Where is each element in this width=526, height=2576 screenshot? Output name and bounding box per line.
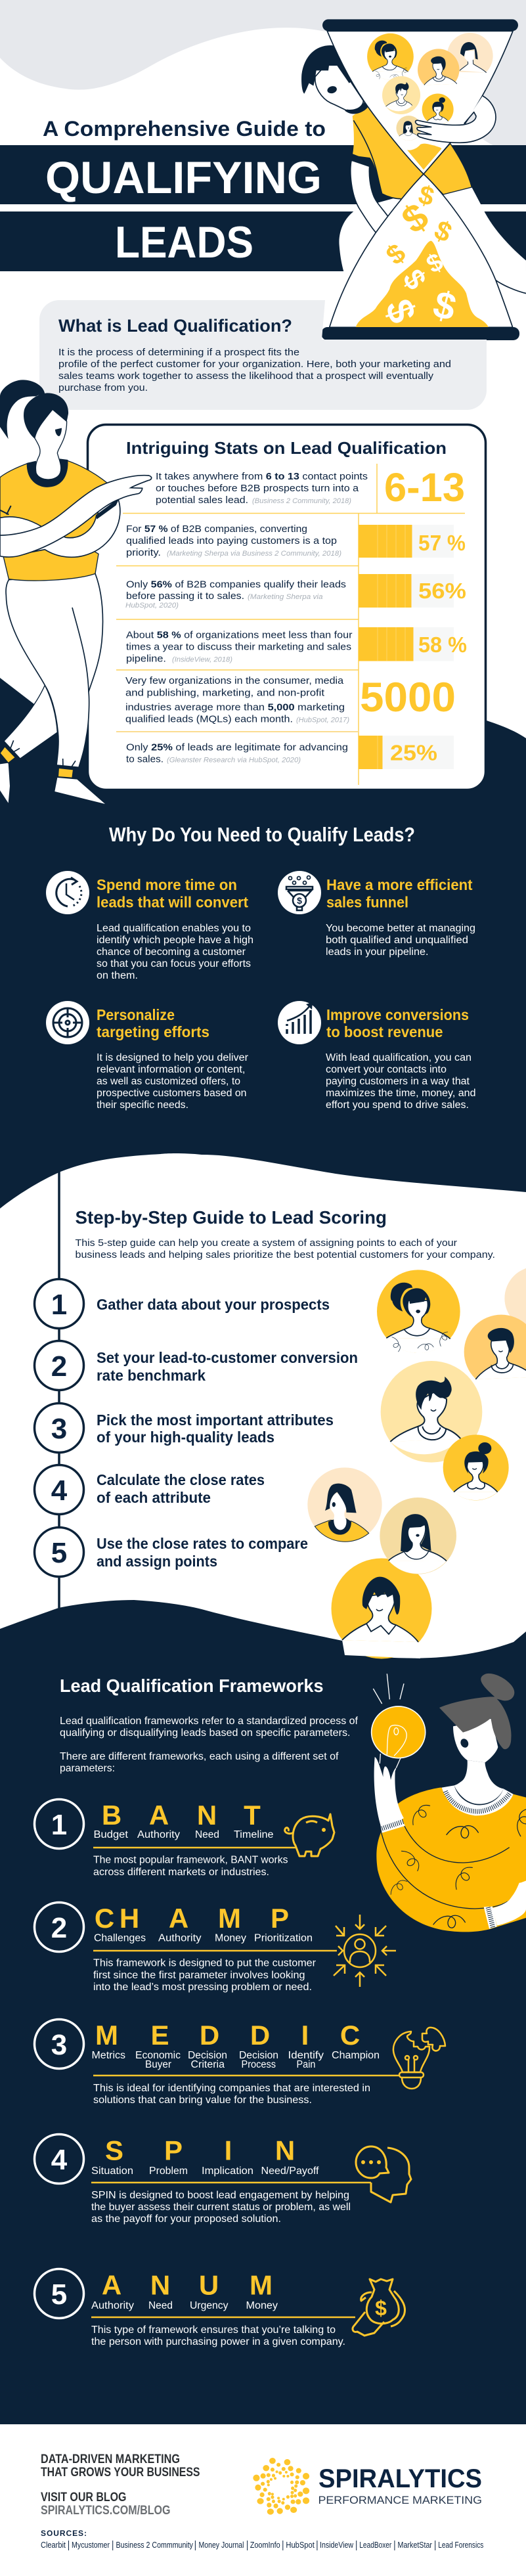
parameters: Prioritization xyxy=(254,1932,313,1944)
icon: funnel xyxy=(278,871,321,914)
step 2: Set your lead-to-customer conversion xyxy=(97,1349,358,1366)
acronym: E xyxy=(150,2020,169,2051)
description: The most popular framework, BANT works xyxy=(93,1855,288,1865)
stats heading: Intriguing Stats on Lead Qualification xyxy=(126,438,447,458)
title band 2 xyxy=(0,211,526,271)
heading: frameworks: Lead Qualification Frameworks xyxy=(60,1676,323,1696)
stat 6 text: Only 25% of leads are legitimate for advancing xyxy=(126,742,348,753)
sources list: InsideView xyxy=(320,2540,353,2550)
stat dividers xyxy=(116,464,465,785)
parameters: Buyer xyxy=(145,2059,171,2070)
description: This framework is designed to put the customer xyxy=(93,1957,317,1969)
acronym: U xyxy=(199,2270,219,2300)
stat 5 text: Very few organizations in the consumer, media xyxy=(125,675,344,686)
reason text xyxy=(326,1052,475,1111)
stat 2 bar: 57 % xyxy=(418,531,466,555)
acronym: P xyxy=(271,1903,289,1934)
parameters: Implication xyxy=(202,2165,253,2177)
acronym: A xyxy=(169,1903,188,1934)
step 4: Calculate the close rates xyxy=(97,1471,265,1488)
stat 3 text: before passing it to sales. xyxy=(126,590,244,602)
falling dollar signs: $ xyxy=(416,180,437,211)
body text xyxy=(58,347,451,393)
acronym: A xyxy=(102,2270,121,2300)
step 1: 1 xyxy=(51,1289,67,1321)
framework 5: ANUM xyxy=(34,2269,405,2347)
stat 1 text: potential sales lead. xyxy=(156,495,248,506)
description: the person with purchasing power in a given company. xyxy=(91,2336,345,2347)
falling dollar signs: $ xyxy=(396,263,433,296)
title: QUALIFYING: QUALIFYING xyxy=(45,152,322,203)
reason title: targeting efforts xyxy=(97,1023,209,1040)
reason text: identify which people have a high xyxy=(97,935,253,946)
reason 2 xyxy=(278,871,475,958)
step 4 xyxy=(34,1465,265,1515)
stat 1 text: (Business 2 Community, 2018) xyxy=(252,497,351,505)
reason text xyxy=(326,923,475,958)
stat 4 text xyxy=(126,629,352,665)
tagline xyxy=(41,2453,200,2518)
description xyxy=(91,2190,351,2225)
sources list: LeadBoxer xyxy=(359,2540,392,2550)
acronym xyxy=(102,2270,273,2300)
title band 1 xyxy=(0,145,526,204)
heading: why qualify: Why Do You Need to Qualify Leads? xyxy=(109,823,415,846)
stat 4 bar: 58 % xyxy=(418,633,467,657)
stat 6 text: (Gleanster Research via HubSpot, 2020) xyxy=(167,757,301,765)
stat 1 text: or touches before B2B prospects turn into a xyxy=(156,483,359,494)
acronym: T xyxy=(244,1800,261,1831)
reason text: You become better at managing xyxy=(326,923,475,934)
reason text: paying customers in a way that xyxy=(326,1076,470,1087)
reason title xyxy=(326,876,473,910)
icon: money bag in hand xyxy=(353,2279,405,2336)
tagline: VISIT OUR BLOG xyxy=(41,2491,126,2504)
intro text: business leads and helping sales prioritize the best potential customers for your company. xyxy=(75,1249,495,1260)
description: into the lead’s most pressing problem or need. xyxy=(93,1982,312,1993)
reason text: relevant information or content, xyxy=(97,1064,246,1075)
sources list: HubSpot xyxy=(286,2540,315,2550)
parameters: Authority xyxy=(137,1829,180,1840)
framework 5: ANUM: 5 xyxy=(51,2278,67,2311)
description: the buyer assess their current status or problem, as well xyxy=(91,2202,351,2213)
background: top grey wave xyxy=(0,0,526,146)
step 1 xyxy=(34,1279,330,1328)
title: LEADS: LEADS xyxy=(115,217,253,267)
framework 1: BANT: 1 xyxy=(51,1809,67,1841)
panel: intriguing stats card xyxy=(88,424,486,789)
stat 2 text xyxy=(126,523,341,558)
framework 3: MEDDIC: 3 xyxy=(51,2029,67,2061)
parameters: Decision xyxy=(188,2050,227,2061)
reason text: With lead qualification, you can xyxy=(326,1052,471,1063)
reason text: Lead qualification enables you to xyxy=(97,923,251,934)
stat 1 text xyxy=(156,471,368,506)
reason title: to boost revenue xyxy=(326,1023,443,1040)
parameters xyxy=(91,2165,319,2177)
logo: spiral of dots xyxy=(253,2458,309,2515)
parameters: Authority xyxy=(91,2300,134,2311)
description: across different markets or industries. xyxy=(93,1867,269,1878)
stat 5 text: qualified leads (MQLs) each month. xyxy=(125,713,293,725)
step 5 xyxy=(34,1528,308,1576)
sources list: Mycustomer xyxy=(72,2540,110,2550)
acronym: S xyxy=(105,2135,123,2166)
reason text xyxy=(97,1052,248,1111)
reason title: leads that will convert xyxy=(97,893,248,910)
step 3: Pick the most important attributes xyxy=(97,1411,334,1429)
icon: head with speech bubble xyxy=(356,2146,411,2202)
tagline: THAT GROWS YOUR BUSINESS xyxy=(41,2466,200,2479)
reason title: Spend more time on xyxy=(97,876,237,893)
parameters: Need xyxy=(195,1829,219,1840)
framework 3: MEDDIC xyxy=(34,2019,445,2106)
stat 6 text: to sales. xyxy=(126,754,164,765)
acronym: B xyxy=(102,1800,121,1831)
stat 5 text: (HubSpot, 2017) xyxy=(296,716,349,724)
parameters: Challenges xyxy=(94,1932,146,1944)
parameters xyxy=(92,2050,380,2070)
reason title xyxy=(97,1006,209,1040)
icon: bulb with puzzle piece xyxy=(393,2028,445,2089)
description: as the payoff for your proposed solution. xyxy=(91,2213,281,2225)
body text: profile of the perfect customer for your organization. Here, both your marketing and xyxy=(58,359,451,370)
reason text: prospective customers based on xyxy=(97,1088,247,1099)
stats content xyxy=(116,438,467,785)
framework 4: SPIN: 4 xyxy=(51,2144,68,2176)
avatars upper xyxy=(307,1270,526,1574)
stat 2 bar xyxy=(359,525,466,558)
reason text: both qualified and unqualified xyxy=(326,935,468,946)
sources list: Money Journal xyxy=(198,2540,244,2550)
icon: target xyxy=(46,1001,89,1044)
tagline: DATA-DRIVEN MARKETING xyxy=(41,2453,180,2466)
falling dollar signs: $ xyxy=(430,214,456,248)
reason title xyxy=(326,1006,469,1040)
parameters: Urgency xyxy=(190,2300,229,2311)
stat 3 text xyxy=(125,579,346,610)
avatars inside hourglass xyxy=(367,33,493,141)
navy section background: frameworks xyxy=(0,1600,526,2424)
stat 3 bar xyxy=(359,574,466,608)
reason text: chance of becoming a customer xyxy=(97,946,246,958)
reason title: Have a more efficient xyxy=(326,876,473,893)
hero illustration: person holding hourglass xyxy=(301,19,526,340)
sources list: Clearbit xyxy=(41,2540,66,2550)
step 4: of each attribute xyxy=(97,1489,211,1506)
description: This is ideal for identifying companies that are interested in xyxy=(93,2083,370,2094)
tagline: SPIRALYTICS.COM/BLOG xyxy=(41,2504,171,2518)
frameworks intro: There are different frameworks, each using a different set of xyxy=(60,1751,339,1762)
parameters: Need/Payoff xyxy=(261,2165,319,2177)
parameters: Economic xyxy=(135,2050,181,2061)
stat 4 bar xyxy=(359,627,467,661)
reason title xyxy=(97,876,248,910)
stat 1 number: 6-13 xyxy=(384,465,465,510)
stat 5 text: and publishing, marketing, and non-profit xyxy=(125,687,325,699)
acronym: H xyxy=(120,1903,139,1934)
parameters: Metrics xyxy=(92,2050,125,2061)
acronym: M xyxy=(95,2020,118,2051)
parameters: Pain xyxy=(297,2059,315,2070)
stat 1 text: It takes anywhere from 6 to 13 contact points xyxy=(156,471,368,482)
avatar cluster xyxy=(307,1266,526,1659)
step 5: 5 xyxy=(51,1537,67,1569)
sources list: Lead Forensics xyxy=(438,2540,484,2550)
description: This type of framework ensures that you’re talking to xyxy=(91,2324,336,2336)
reason text: leads in your pipeline. xyxy=(326,946,428,958)
logo wordmark: SPIRALYTICS xyxy=(318,2464,482,2493)
reason text: maximizes the time, money, and xyxy=(326,1088,475,1099)
description xyxy=(93,1957,317,1993)
divider xyxy=(116,731,359,732)
stat 2 text: (Marketing Sherpa via Business 2 Community, 2018) xyxy=(167,550,341,558)
acronym xyxy=(95,2020,360,2051)
step 3 xyxy=(34,1403,334,1453)
reason text xyxy=(97,923,253,981)
parameters xyxy=(91,2300,278,2311)
acronym: I xyxy=(225,2135,232,2166)
icon: money bag in hand: $ xyxy=(375,2296,387,2320)
reason text: It is designed to help you deliver xyxy=(97,1052,248,1063)
acronym: N xyxy=(197,1800,217,1831)
falling dollar signs: $ xyxy=(422,248,448,279)
illustration: woman pointing at stats xyxy=(0,380,152,804)
stat 4 text: times a year to discuss their marketing and sales xyxy=(126,641,351,653)
stat 6 text xyxy=(126,742,348,765)
parameters: Need xyxy=(148,2300,173,2311)
acronym xyxy=(102,1800,261,1831)
body text: sales teams work together to assess the likelihood that a prospect will eventually xyxy=(58,370,434,382)
framework 2: CHAMP xyxy=(34,1902,396,1993)
parameters: Timeline xyxy=(234,1829,273,1840)
reason text: so that you can focus your efforts xyxy=(97,958,251,969)
falling dollar signs xyxy=(377,180,460,329)
step 3: 3 xyxy=(51,1413,67,1445)
hand holding hourglass xyxy=(416,96,496,143)
parameters: Decision xyxy=(239,2050,278,2061)
acronym: A xyxy=(149,1800,169,1831)
stat 5 text: industries average more than 5,000 marketing xyxy=(125,701,345,713)
stat 4 text: pipeline. xyxy=(126,653,166,665)
reason text: on them. xyxy=(97,970,138,981)
step 1: Gather data about your prospects xyxy=(97,1296,330,1313)
frameworks intro: Lead qualification frameworks refer to a standardized process of xyxy=(60,1716,359,1727)
parameters: Budget xyxy=(93,1829,129,1840)
reason title: Improve conversions xyxy=(326,1006,469,1023)
sources heading: SOURCES: xyxy=(41,2529,87,2538)
stat 3 bar: 56% xyxy=(418,579,466,603)
intro text xyxy=(75,1237,495,1260)
parameters: Identify xyxy=(288,2050,324,2061)
reason 1 xyxy=(46,871,253,981)
reason text: convert your contacts into xyxy=(326,1064,447,1075)
acronym: C xyxy=(95,1903,114,1934)
step 2 xyxy=(34,1341,358,1390)
parameters: Money xyxy=(215,1932,246,1944)
framework 4: SPIN xyxy=(34,2135,411,2225)
hourglass glass xyxy=(321,19,519,340)
description xyxy=(91,2324,345,2347)
reason title: Personalize xyxy=(97,1006,175,1023)
stat 2 text: For 57 % of B2B companies, converting xyxy=(126,523,307,535)
framework 1: BANT xyxy=(34,1800,334,1878)
acronym: C xyxy=(340,2020,360,2051)
framework 2: CHAMP: 2 xyxy=(51,1912,67,1944)
panel: what is lead qualification xyxy=(39,300,487,410)
stat 6 bar: 25% xyxy=(390,741,437,765)
acronym xyxy=(95,1903,289,1934)
acronym: P xyxy=(164,2135,183,2166)
parameters: Money xyxy=(246,2300,278,2311)
intro text: This 5-step guide can help you create a system of assigning points to each of your xyxy=(75,1237,457,1249)
parameters: Champion xyxy=(332,2050,380,2061)
description: first since the first parameter involves looking xyxy=(93,1970,305,1981)
title line: A Comprehensive Guide to xyxy=(43,117,326,141)
parameters: Process xyxy=(242,2059,276,2070)
stat 3 text: Only 56% of B2B companies qualify their leads xyxy=(126,579,346,590)
heading: step by step: Step-by-Step Guide to Lead Scoring xyxy=(75,1207,387,1228)
icon: clock xyxy=(46,871,89,914)
acronym: M xyxy=(218,1903,241,1934)
stat 3 text: HubSpot, 2020) xyxy=(125,602,179,610)
stat 4 text: (InsideView, 2018) xyxy=(172,655,232,663)
sources list: MarketStar xyxy=(398,2540,433,2550)
stat 6 bar xyxy=(359,736,454,769)
parameters: Authority xyxy=(158,1932,202,1944)
stat 2 text: priority. xyxy=(126,547,161,558)
reason text: as well as customized offers, to xyxy=(97,1076,240,1087)
acronym: M xyxy=(250,2270,273,2300)
acronym: I xyxy=(301,2020,309,2051)
falling dollar signs: $ xyxy=(429,282,460,329)
icon: piggy bank xyxy=(285,1814,334,1856)
description: solutions that can bring value for the business. xyxy=(93,2095,312,2106)
sources list xyxy=(41,2540,484,2550)
parameters xyxy=(93,1829,273,1840)
frameworks intro: qualifying or disqualifying leads based on specific parameters. xyxy=(60,1727,351,1739)
icon: customer with arrows xyxy=(334,1915,396,1987)
icon: growth chart xyxy=(278,1001,321,1044)
heading: What is Lead Qualification? xyxy=(58,316,292,336)
step 5: Use the close rates to compare xyxy=(97,1535,308,1552)
falling dollar signs: $ xyxy=(380,237,411,271)
avatar: bottom yellow xyxy=(331,1558,432,1659)
illustration: woman with light bulb xyxy=(372,1674,526,1932)
acronym: D xyxy=(200,2020,219,2051)
stat 5 text xyxy=(125,675,349,725)
sources list: ZoomInfo xyxy=(250,2540,280,2550)
stat 5 number: 5000 xyxy=(360,675,456,721)
stat 2 text: qualified leads into paying customers is a top xyxy=(126,535,337,546)
reason 4 xyxy=(278,1001,475,1111)
parameters: Problem xyxy=(149,2165,188,2177)
step 4: 4 xyxy=(51,1475,68,1507)
reason text: their specific needs. xyxy=(97,1099,188,1111)
navy section background: why qualify xyxy=(0,678,526,1209)
description xyxy=(93,2083,370,2106)
body text: purchase from you. xyxy=(58,382,148,393)
falling dollar signs: $ xyxy=(394,194,436,242)
acronym: D xyxy=(250,2020,270,2051)
parameters: Situation xyxy=(91,2165,133,2177)
reason text: effort you spend to drive sales. xyxy=(326,1099,469,1111)
description: SPIN is designed to boost lead engagement by helping xyxy=(91,2190,349,2201)
timeline line xyxy=(58,1172,60,1608)
reason title: sales funnel xyxy=(326,893,408,910)
falling dollar signs: $ xyxy=(377,294,424,328)
icon: funnel: $ xyxy=(297,895,302,906)
stat 3 text: (Marketing Sherpa via xyxy=(248,593,323,601)
body text: It is the process of determining if a prospect fits the xyxy=(58,347,299,358)
acronym: N xyxy=(150,2270,170,2300)
logo tagline: PERFORMANCE MARKETING xyxy=(318,2494,482,2506)
step 2: 2 xyxy=(51,1350,67,1383)
step 2: rate benchmark xyxy=(97,1367,206,1384)
step 3: of your high-quality leads xyxy=(97,1429,274,1446)
description xyxy=(93,1855,288,1878)
frameworks intro: parameters: xyxy=(60,1763,115,1774)
acronym xyxy=(105,2135,295,2166)
parameters: Criteria xyxy=(190,2059,225,2070)
parameters xyxy=(94,1932,313,1944)
step 5: and assign points xyxy=(97,1553,217,1570)
stat 4 text: About 58 % of organizations meet less than four xyxy=(126,629,352,641)
acronym: N xyxy=(275,2135,295,2166)
sources list: Business 2 Commmunity xyxy=(116,2540,193,2550)
frameworks intro xyxy=(60,1716,359,1774)
footer xyxy=(41,2453,484,2550)
reason 3 xyxy=(46,1001,248,1111)
